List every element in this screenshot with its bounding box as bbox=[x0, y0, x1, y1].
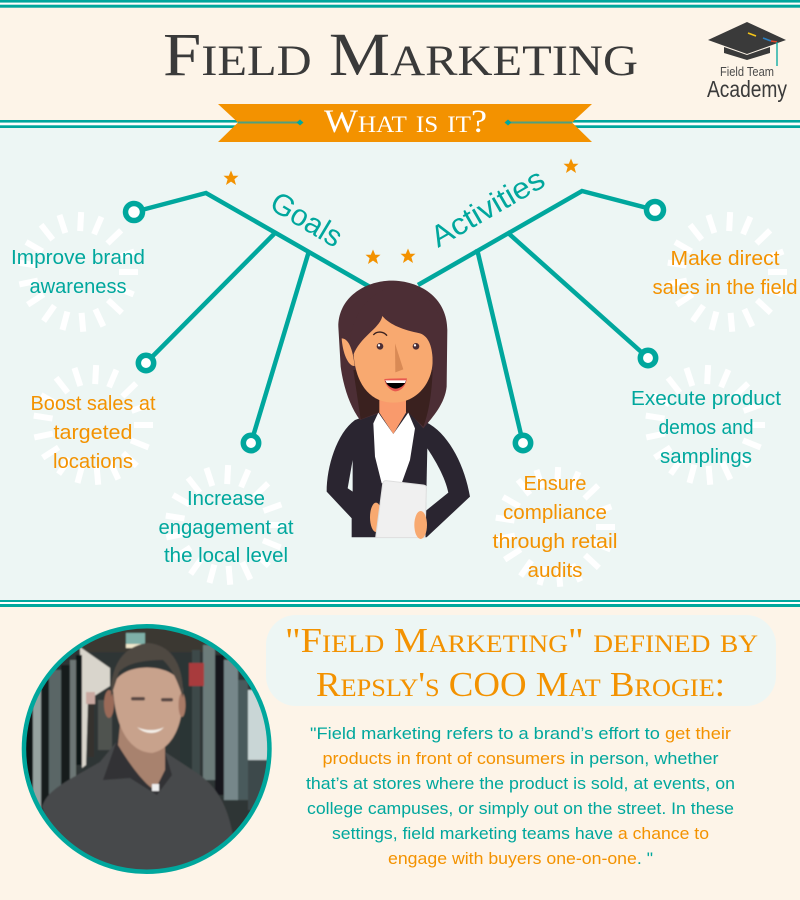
heading pill bbox=[266, 615, 776, 706]
photo background: corridor bbox=[26, 628, 268, 834]
middle stripes bbox=[0, 120, 800, 128]
hair bbox=[111, 643, 183, 698]
quote text: products in front of consumers in person, whether bbox=[322, 750, 705, 768]
quote text: "Field marketing refers to a brand’s effort to get their bbox=[310, 725, 725, 743]
portrait photo of Mat Brogie bbox=[20, 624, 275, 880]
bottom stripes bbox=[0, 600, 800, 607]
activity: Ensure compliance through retail audits: compliance bbox=[503, 501, 607, 524]
activities connector lines bbox=[418, 191, 664, 451]
goal: Improve brand awareness: Improve brand bbox=[11, 246, 145, 269]
head bbox=[113, 668, 183, 753]
neck bbox=[118, 725, 165, 790]
tablet bbox=[376, 481, 426, 538]
left hand bbox=[370, 503, 382, 532]
heading: Field Marketing defined by Repsly's COO Mat Brogie: Repsly's COO Mat Brogie: bbox=[316, 665, 725, 704]
label: Activities: Activities bbox=[425, 162, 551, 254]
heading: Field Marketing defined by Repsly's COO Mat Brogie: "Field Marketing" defined by bbox=[285, 621, 758, 660]
activity: Make direct sales in the field: Make direct bbox=[670, 247, 780, 270]
activity: Execute product demos and samplings: Execute product bbox=[631, 387, 781, 410]
nose bbox=[395, 343, 403, 372]
goals connector lines bbox=[126, 193, 370, 451]
face bbox=[353, 313, 433, 403]
activity: Make direct sales in the field: sales in the field bbox=[652, 276, 798, 299]
goal: Increase engagement at the local level: engagement at bbox=[158, 516, 294, 539]
hair shadow bbox=[353, 370, 433, 427]
fringe bbox=[350, 287, 443, 367]
ear bbox=[342, 338, 355, 366]
background: mint panel bbox=[0, 127, 800, 600]
quote text: settings, field marketing teams have a chance to bbox=[332, 825, 703, 843]
shirt bbox=[373, 413, 415, 483]
icon: graduation cap bbox=[708, 22, 786, 66]
eyebrow bbox=[373, 332, 387, 336]
undershirt bbox=[152, 784, 159, 791]
quote text: college campuses, or simply out on the street. In these bbox=[307, 800, 734, 818]
heading: Field Marketing defined by Repsly's COO Mat Brogie bbox=[285, 621, 758, 704]
activity: Execute product demos and samplings: demos and bbox=[658, 416, 754, 439]
jacket bbox=[327, 412, 470, 537]
activity: Ensure compliance through retail audits: Ensure bbox=[524, 472, 586, 495]
eyes and smile bbox=[131, 697, 173, 733]
goal: Boost sales at targeted locations: Boost sales at bbox=[30, 392, 156, 415]
label: Goals: Goals bbox=[264, 186, 348, 254]
mouth bbox=[384, 378, 407, 391]
eyes bbox=[377, 343, 419, 350]
activity: Ensure compliance through retail audits: audits bbox=[528, 559, 582, 582]
quote text: that’s at stores where the product is sold, at events, on bbox=[306, 775, 735, 793]
title: Field Marketing bbox=[163, 22, 638, 89]
illustration: businesswoman with tablet bbox=[327, 281, 470, 539]
arm gaps bbox=[348, 448, 448, 511]
hair back bbox=[338, 281, 447, 428]
stars bbox=[224, 158, 578, 264]
logo: Field Team Academy bbox=[707, 22, 787, 102]
goal: Increase engagement at the local level: Increase bbox=[187, 487, 265, 510]
right hand bbox=[414, 511, 427, 539]
activity: Ensure compliance through retail audits: through retail bbox=[492, 530, 618, 553]
quote text: engage with buyers one-on-one . " bbox=[388, 850, 652, 868]
shirt bbox=[42, 740, 233, 880]
decorative sunbursts bbox=[19, 212, 787, 587]
goal: Boost sales at targeted locations: locations bbox=[53, 450, 133, 473]
banner: What is it?: What is it? bbox=[324, 104, 487, 140]
neck bbox=[379, 397, 406, 434]
activity: Execute product demos and samplings: samplings bbox=[660, 445, 752, 468]
logo text: Field Team: Field Team bbox=[720, 65, 774, 79]
goal: Increase engagement at the local level: the local level bbox=[164, 544, 288, 567]
banner: What is it? bbox=[218, 104, 592, 142]
logo text: Academy: Academy bbox=[707, 76, 787, 102]
top stripes bbox=[0, 0, 800, 8]
goal: Improve brand awareness: awareness bbox=[30, 275, 126, 298]
goal: Boost sales at targeted locations: targeted bbox=[54, 421, 132, 444]
